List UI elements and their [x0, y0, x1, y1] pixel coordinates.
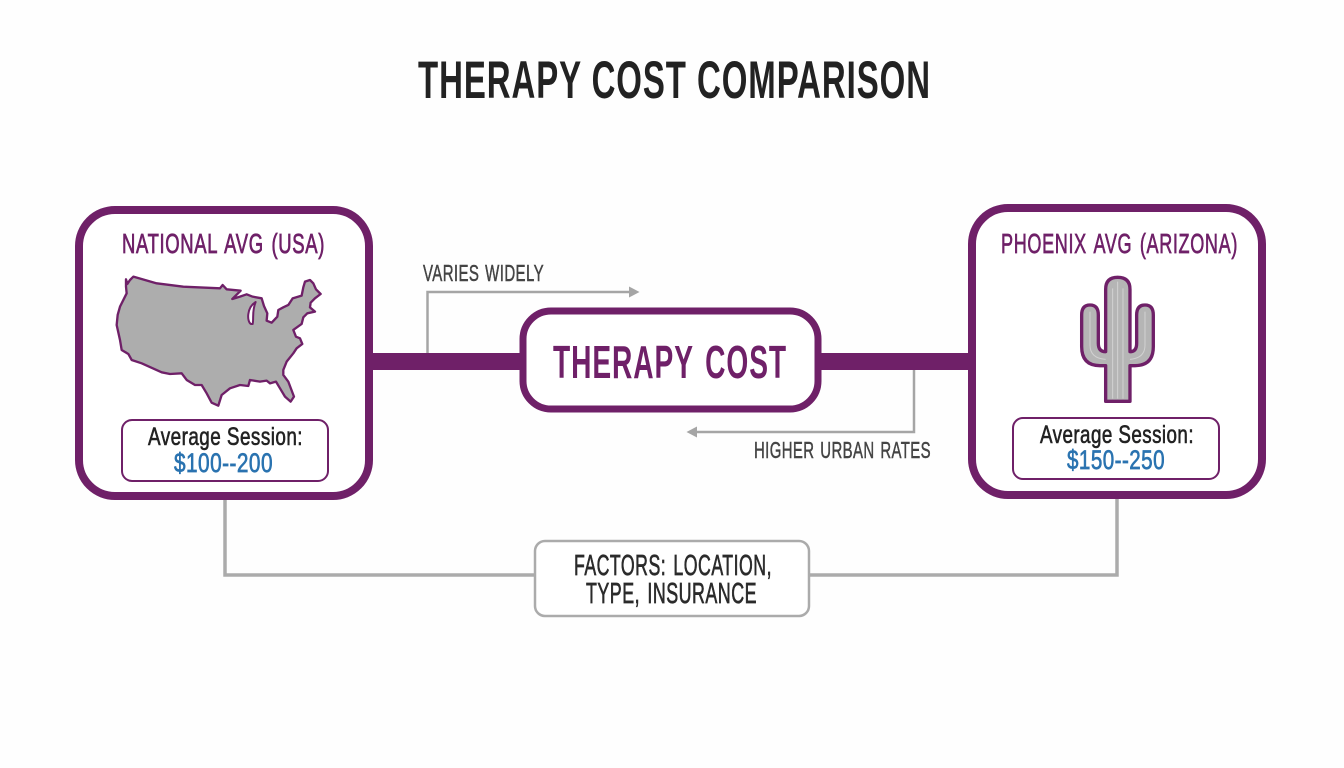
- icon detail: Lake Michigan: [248, 302, 256, 324]
- connector: national to therapy cost: [370, 353, 522, 370]
- value: phoenix cost: $150--250: [1067, 445, 1165, 475]
- heading: therapy cost: THERAPY COST: [553, 336, 787, 388]
- heading: national avg: NATIONAL AVG (USA): [122, 228, 325, 259]
- panel: national average: [79, 210, 369, 496]
- arrow: varies widely: [428, 286, 640, 353]
- label: average session: Average Session:: [1040, 421, 1194, 449]
- text: factors line 1: FACTORS: LOCATION,: [574, 550, 772, 582]
- annotation: higher urban rates: HIGHER URBAN RATES: [754, 437, 931, 463]
- icon: USA map: [117, 277, 321, 406]
- annotation: varies widely: VARIES WIDELY: [423, 260, 544, 286]
- text: factors line 2: TYPE, INSURANCE: [586, 578, 757, 610]
- label: average session: Average Session:: [148, 423, 303, 451]
- cost box: phoenix: [1013, 418, 1219, 479]
- cost box: national: [122, 420, 328, 481]
- panel: phoenix average: [972, 208, 1262, 495]
- arrow: higher urban rates: [686, 370, 914, 438]
- panel: therapy cost: [523, 311, 818, 409]
- connector: phoenix to factors: [808, 498, 1117, 575]
- connector: national to factors: [225, 498, 536, 575]
- value: national cost: $100--200: [174, 448, 273, 478]
- title: THERAPY COST COMPARISON: [418, 51, 931, 110]
- icon: cactus: [1082, 277, 1153, 401]
- connector: therapy cost to phoenix: [818, 353, 972, 370]
- panel: factors: [535, 541, 809, 616]
